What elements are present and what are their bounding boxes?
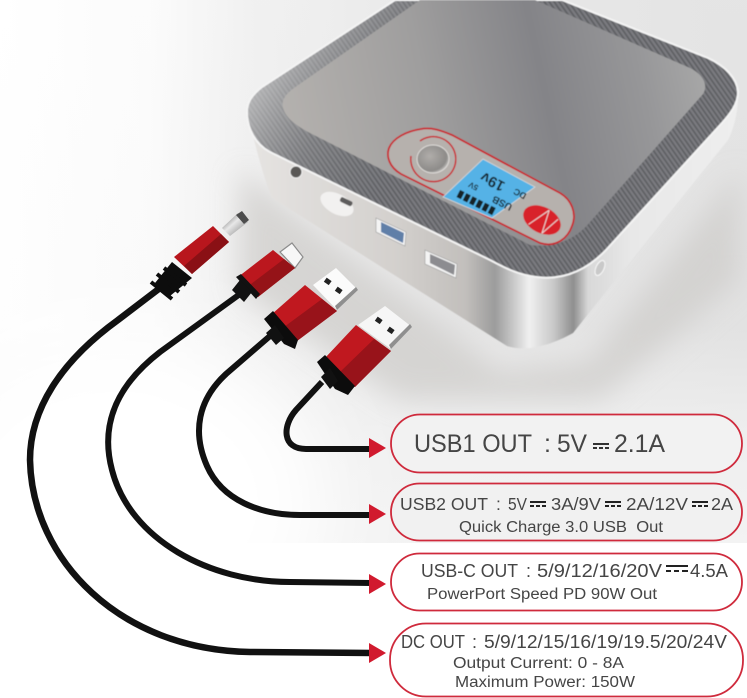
callout: USB2 OUT: :	[496, 494, 501, 514]
lcd screen: USB	[491, 193, 514, 212]
lcd screen: DC	[511, 186, 528, 201]
callout: DC OUT: DC OUT	[401, 632, 465, 652]
callout: USB2 OUT: 5V	[508, 494, 527, 514]
arrow: USB1	[369, 438, 386, 458]
callout: USB1 OUT: 2.1A	[614, 430, 665, 458]
callout: USB2 OUT: 2A/12V	[626, 494, 688, 514]
dc input port	[290, 166, 302, 178]
callout: USB2 OUT: 3A/9V	[551, 494, 601, 514]
cable: DC	[30, 288, 372, 653]
callout: USB1 OUT: :	[544, 430, 551, 458]
callout: DC OUT: Output Current: 0 - 8A	[453, 655, 625, 672]
callout: DC OUT: 5/9/12/15/16/19/19.5/20/24V	[484, 632, 727, 652]
callout: DC OUT: Maximum Power: 150W	[455, 674, 635, 691]
callout: USB-C OUT	[391, 554, 742, 610]
cable: USB-C	[108, 294, 372, 583]
power bank device	[247, 0, 738, 348]
callout: DC OUT	[390, 624, 743, 696]
callout: USB-C OUT: USB-C OUT	[421, 561, 518, 581]
device top rim	[247, 0, 738, 278]
cable: USB1	[287, 382, 372, 449]
lcd screen: 19v	[477, 168, 508, 195]
callout: USB2 OUT: 2A	[711, 494, 733, 514]
callout: DC OUT: :	[472, 632, 477, 652]
callout: USB2 OUT: USB2 OUT	[400, 494, 488, 514]
callout: USB-C OUT: PowerPort Speed PD 90W Out	[427, 586, 658, 603]
callout: USB1 OUT: 5V	[557, 430, 587, 458]
usb 1 port	[425, 250, 457, 278]
arrow: USB2	[369, 504, 386, 524]
callout: USB1 OUT	[391, 414, 742, 472]
device top plate	[283, 0, 705, 246]
side button	[593, 259, 607, 277]
control panel	[388, 128, 574, 244]
usb-c port	[316, 187, 358, 221]
device shadow	[240, 170, 740, 400]
callout: USB1 OUT: USB1 OUT	[414, 430, 532, 458]
device side walls	[247, 88, 738, 348]
callout: USB-C OUT: 5/9/12/16/20V	[537, 561, 662, 581]
lcd screen	[443, 159, 535, 218]
arrow: USB-C	[369, 574, 386, 594]
power button	[411, 137, 456, 182]
connector: USB1 plug	[317, 306, 412, 395]
callout: USB-C OUT: 4.5A	[690, 561, 728, 581]
connector: DC plug	[151, 211, 249, 299]
connector: USB2 plug	[264, 268, 358, 349]
usb 2 port	[376, 218, 406, 246]
callout: USB2 OUT: Quick Charge 3.0 USB Out	[459, 519, 664, 536]
logo	[518, 199, 566, 241]
cable: USB2	[199, 336, 372, 515]
arrow: DC	[369, 643, 386, 663]
callout: USB2 OUT	[391, 484, 742, 540]
lcd screen: 5V	[467, 179, 480, 192]
callout: USB-C OUT: :	[526, 561, 531, 581]
connector: USB-C plug	[232, 243, 303, 302]
